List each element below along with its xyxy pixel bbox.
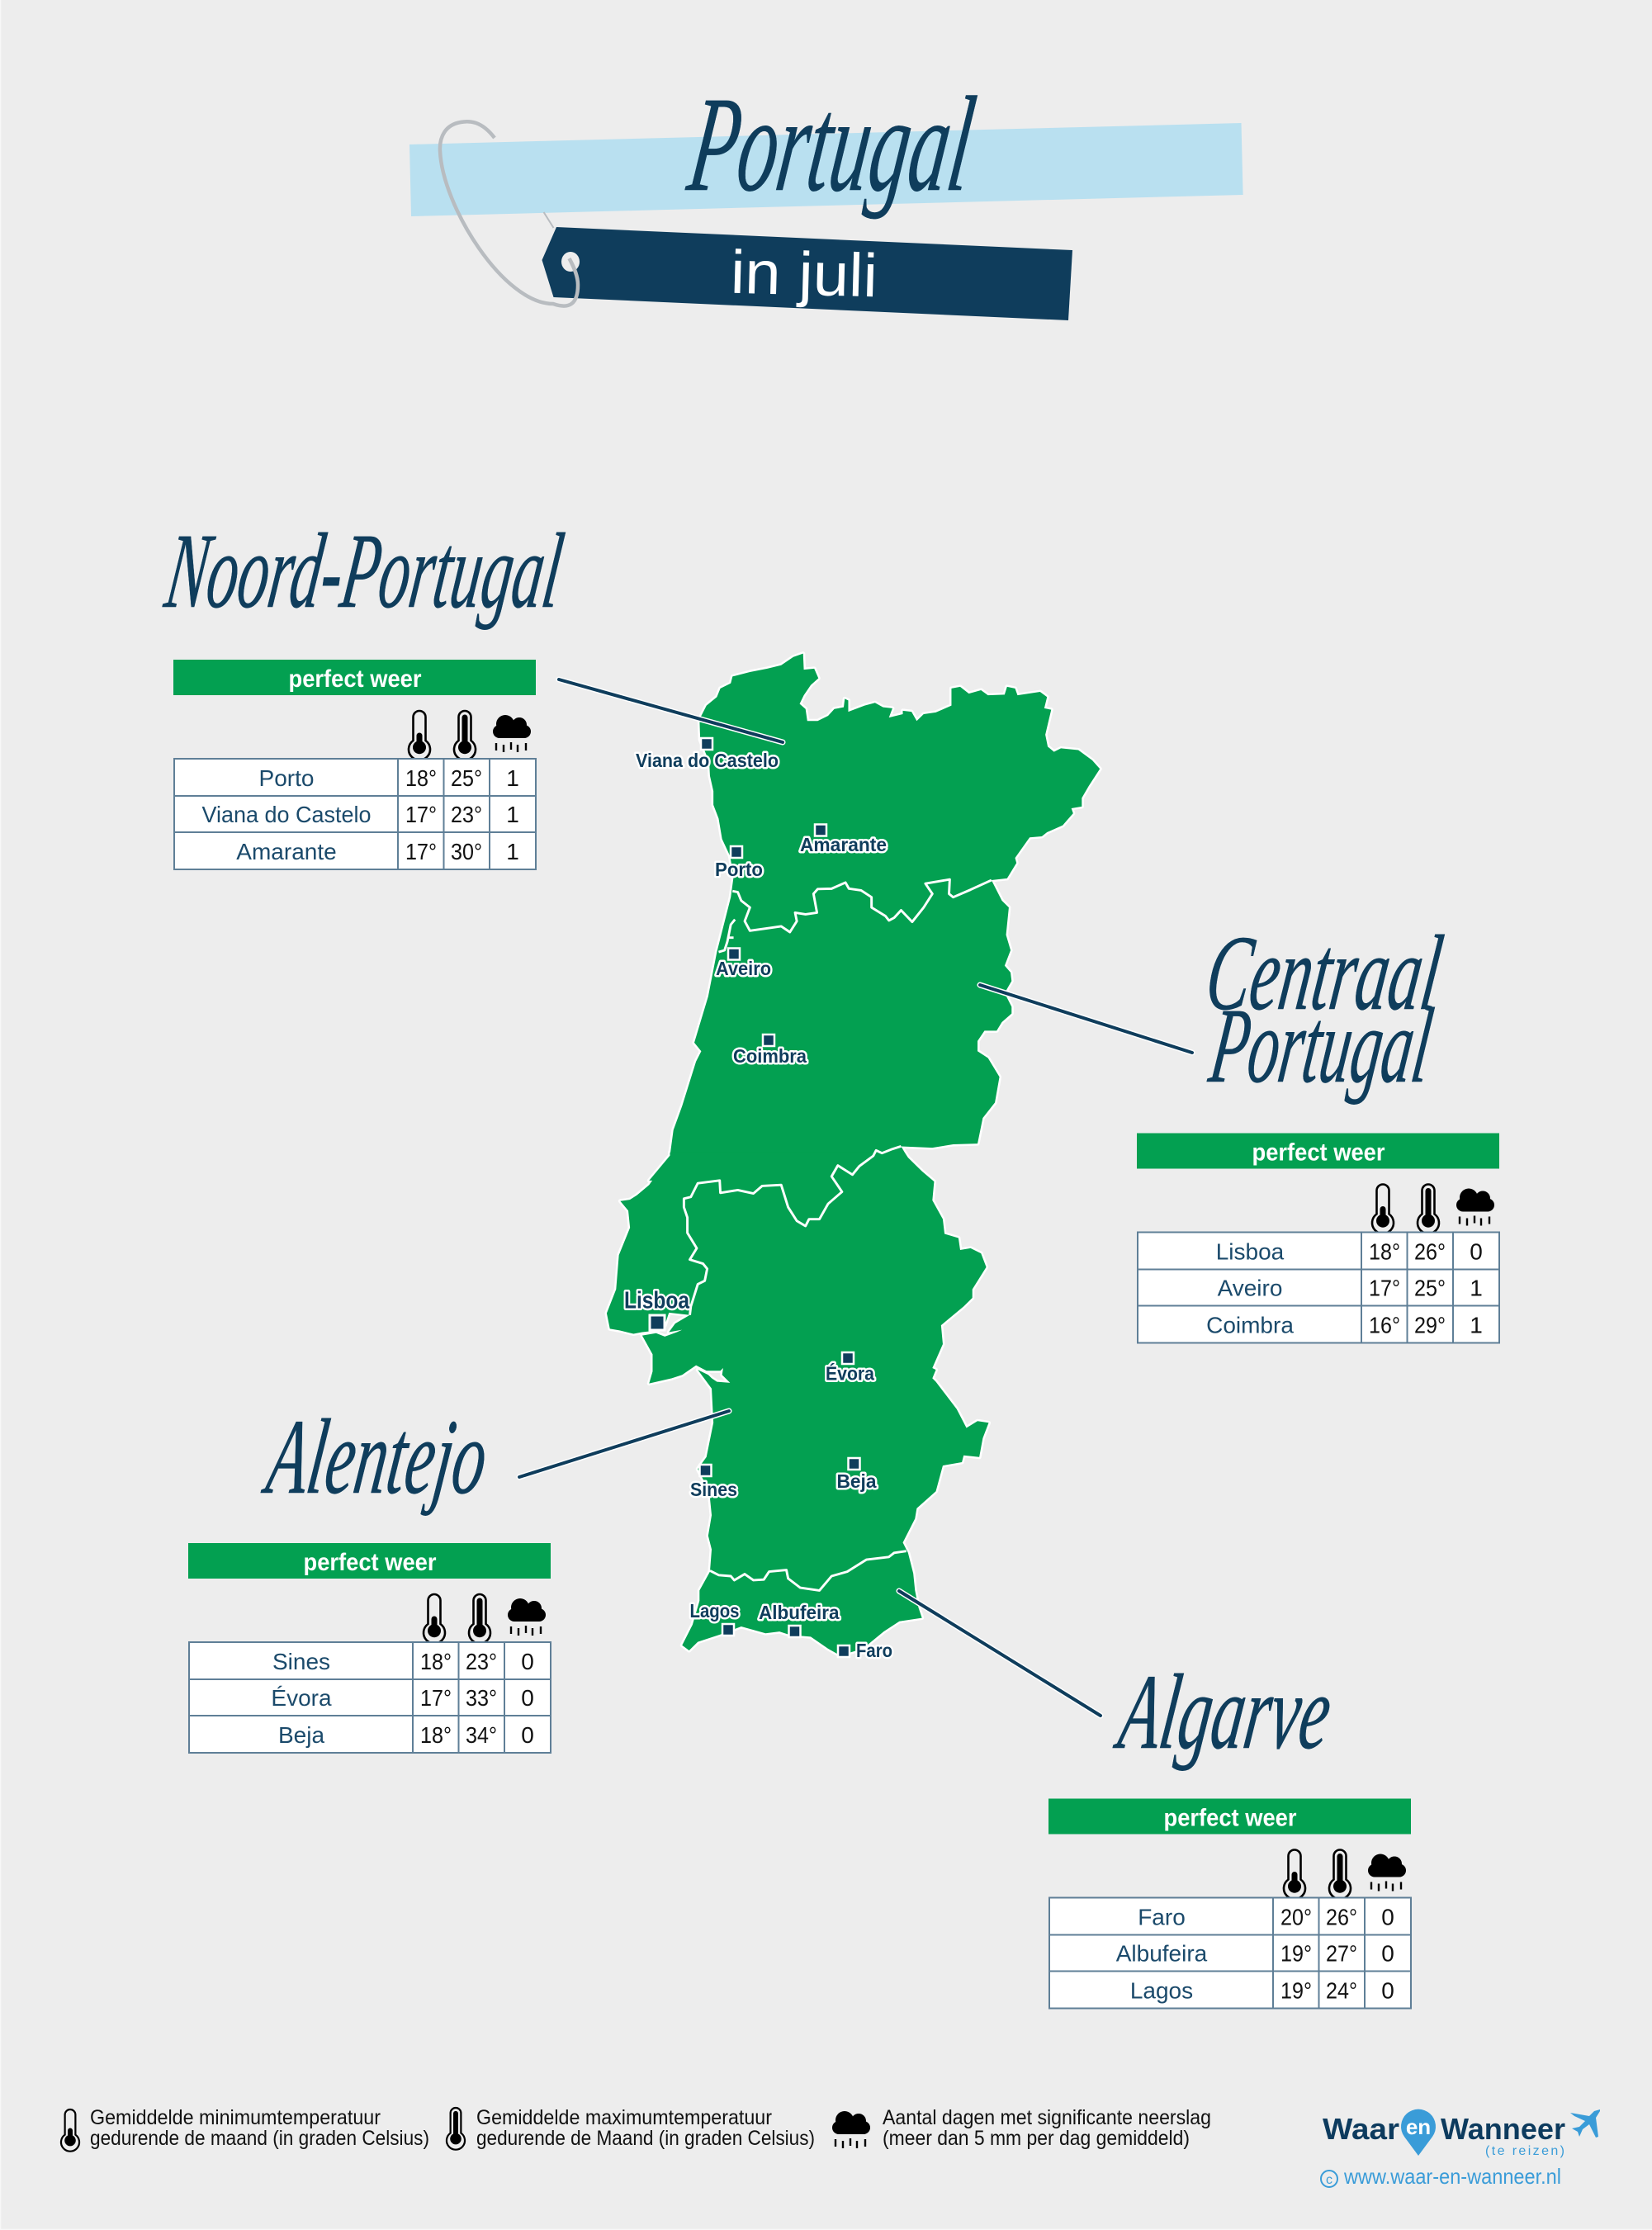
copyright: c [1326, 2173, 1332, 2187]
legend [61, 2106, 1211, 2152]
logo: Waar en Wanneer [1321, 2109, 1600, 2189]
weather table: Lisboa [1216, 1238, 1285, 1265]
city: Viana do Castelo: Viana do Castelo [636, 750, 779, 771]
weather table: 0 [521, 1722, 534, 1748]
weather table: 0 [521, 1685, 534, 1711]
region border Alentejo / Algarve [710, 1551, 906, 1590]
heading: Centraal Portugal: Centraal [1200, 915, 1449, 1033]
weather table: 19° [1280, 1978, 1312, 2003]
weather table: 0 [1381, 1904, 1394, 1930]
weather table [1049, 1897, 1411, 2008]
weather table: 26° [1414, 1238, 1446, 1265]
badge: perfect weer [1137, 1133, 1499, 1169]
legend: maximum temperature: gedurende de Maand (in graden Celsius) [476, 2127, 815, 2150]
city: Beja: Beja [837, 1470, 877, 1492]
panel: Centraal Portugal [1137, 1133, 1499, 1342]
weather table: Viana do Castelo [201, 802, 372, 827]
weather table: Albufeira [1116, 1940, 1208, 1967]
weather table: 1 [506, 765, 519, 791]
weather table: 18° [420, 1722, 452, 1748]
logo plane [1570, 2109, 1600, 2138]
badge: perfect weer: perfect weer [304, 1549, 437, 1576]
weather table: 1 [506, 802, 519, 827]
badge: perfect weer [188, 1543, 551, 1579]
weather table: 1 [1470, 1275, 1483, 1301]
city: Lagos [690, 1600, 740, 1636]
weather table: 20° [1280, 1904, 1312, 1930]
weather table: 17° [420, 1685, 452, 1711]
dark tag [542, 227, 1072, 320]
city: Aveiro [716, 948, 771, 979]
legend: minimum temperature: gedurende de maand (in graden Celsius) [90, 2127, 429, 2150]
logo pin [1401, 2109, 1436, 2156]
panel: Alentejo [188, 1543, 551, 1753]
city: Coimbra [733, 1035, 807, 1067]
city: Faro [838, 1640, 892, 1661]
region border north / centre [718, 879, 992, 952]
logo pin text: en [1406, 2114, 1431, 2139]
city: Coimbra: Coimbra [733, 1045, 807, 1067]
logo tagline: (te reizen) [1485, 2144, 1564, 2158]
weather table: 17° [405, 802, 437, 827]
badge: perfect weer: perfect weer [1252, 1139, 1385, 1166]
tag hole [561, 252, 580, 272]
weather table [189, 1642, 551, 1753]
weather table [174, 759, 536, 869]
weather table: 34° [466, 1722, 497, 1748]
city: Lisboa [624, 1288, 690, 1330]
subtitle: in juli: in juli [730, 238, 878, 310]
city: Beja [837, 1458, 877, 1492]
city: Sines [690, 1465, 737, 1500]
icons: min, max, rain [409, 711, 531, 760]
city: Lagos: Lagos [690, 1600, 740, 1622]
white coast outline [607, 654, 1100, 1655]
city: Lisboa: Lisboa [624, 1288, 690, 1314]
city: Porto [715, 846, 763, 880]
icons: min, max, rain [1372, 1184, 1494, 1233]
weather table: 18° [1369, 1238, 1400, 1265]
legend: minimum temperature [61, 2106, 429, 2152]
map of Portugal [607, 654, 1100, 1655]
heading: Alentejo: Alentejo [257, 1399, 495, 1517]
weather table: 17° [1369, 1275, 1400, 1301]
website: www.waar-en-wanneer.nl [1343, 2164, 1561, 2189]
panel: Noord-Portugal [173, 660, 536, 869]
city: Aveiro: Aveiro [716, 958, 771, 979]
city: Albufeira: Albufeira [759, 1602, 840, 1623]
city: Viana do Castelo [636, 738, 779, 771]
weather table: 0 [521, 1649, 534, 1674]
weather table: 23° [451, 802, 482, 827]
city: Albufeira [759, 1602, 840, 1637]
legend: maximum temperature: Gemiddelde maximumtemperatuur [476, 2106, 772, 2129]
legend: precipitation: (meer dan 5 mm per dag gemiddeld) [883, 2127, 1190, 2150]
weather table: 17° [405, 839, 437, 864]
weather table: Coimbra [1206, 1313, 1294, 1338]
weather table: 18° [405, 765, 437, 791]
legend: minimum temperature: Gemiddelde minimumtemperatuur [90, 2106, 381, 2129]
city: Amarante [800, 824, 887, 855]
city: Évora: Évora [826, 1362, 874, 1384]
icons: min, max, rain [424, 1594, 546, 1644]
legend: maximum temperature [447, 2106, 815, 2150]
weather table: Évora [271, 1685, 332, 1711]
title banner [409, 69, 1243, 320]
city: Porto: Porto [715, 859, 763, 880]
weather table: 29° [1414, 1313, 1446, 1338]
weather table: Aveiro [1218, 1275, 1282, 1301]
title: Portugal: Portugal [680, 69, 983, 220]
tag ring [440, 121, 578, 306]
weather table: 33° [466, 1685, 497, 1711]
region border centre / Alentejo [684, 1146, 901, 1315]
weather table: 23° [466, 1649, 497, 1674]
legend: precipitation [832, 2106, 1211, 2150]
heading: Centraal Portugal [1200, 915, 1449, 1106]
weather table: 19° [1280, 1940, 1312, 1967]
weather table: 18° [420, 1649, 452, 1674]
panel: Algarve [1048, 1798, 1411, 2008]
heading: Algarve: Algarve [1109, 1654, 1338, 1772]
weather table [1138, 1232, 1499, 1342]
weather table: Lagos [1130, 1978, 1193, 2003]
city: Évora [826, 1352, 874, 1384]
light blue ribbon [409, 123, 1243, 216]
heading: Centraal Portugal: Portugal [1203, 987, 1439, 1106]
weather table: 0 [1470, 1238, 1483, 1265]
weather table: 27° [1326, 1940, 1357, 1967]
weather table: Sines [272, 1649, 330, 1674]
weather table: 0 [1381, 1940, 1394, 1967]
weather table: 26° [1326, 1904, 1357, 1930]
weather table: 25° [451, 765, 482, 791]
badge: perfect weer: perfect weer [1164, 1805, 1297, 1831]
logo wordmark: Waar [1323, 2112, 1399, 2146]
icons: min, max, rain [1284, 1849, 1406, 1899]
badge: perfect weer [173, 660, 536, 695]
heading: Noord-Portugal: Noord-Portugal [159, 513, 570, 631]
city: Sines: Sines [690, 1479, 737, 1500]
tag string thin line [544, 212, 553, 228]
weather table: 24° [1326, 1978, 1357, 2003]
weather table: 1 [1470, 1313, 1483, 1338]
badge: perfect weer: perfect weer [289, 665, 422, 693]
city: Amarante: Amarante [800, 834, 887, 855]
leader lines [519, 679, 1192, 1716]
weather table: Beja [278, 1722, 324, 1748]
weather table: 30° [451, 839, 482, 864]
weather table: Faro [1138, 1904, 1186, 1930]
legend: precipitation: Aantal dagen met significante neerslag [883, 2106, 1211, 2129]
city markers and labels [624, 738, 892, 1661]
weather table: Porto [259, 765, 314, 791]
weather table: Amarante [236, 839, 337, 864]
badge: perfect weer [1048, 1798, 1411, 1835]
weather table: 16° [1369, 1313, 1400, 1338]
green land [607, 654, 1100, 1655]
weather table: 1 [506, 839, 519, 864]
weather table: 0 [1381, 1978, 1394, 2003]
weather table: 25° [1414, 1275, 1446, 1301]
city: Faro: Faro [856, 1640, 892, 1661]
copyright [1321, 2171, 1337, 2187]
logo wordmark second: Wanneer [1441, 2112, 1565, 2146]
